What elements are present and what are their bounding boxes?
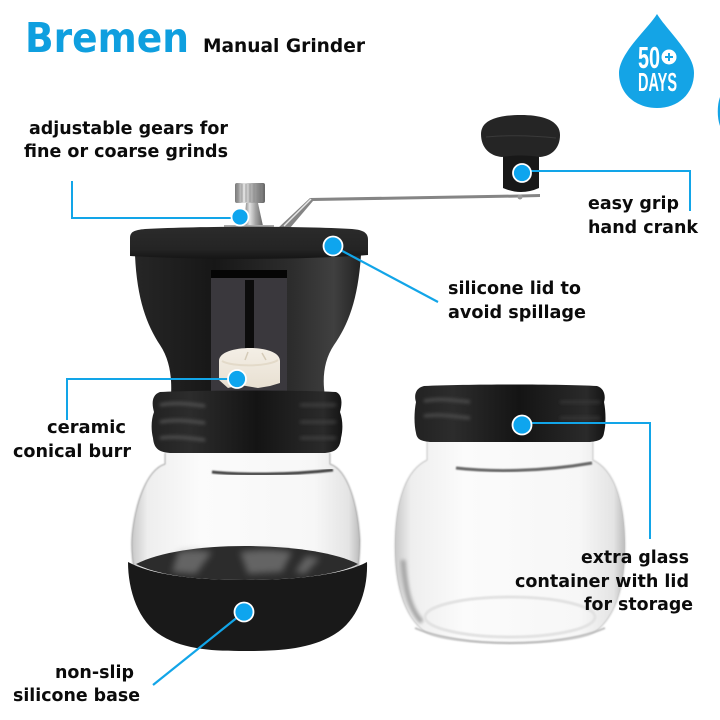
dark interior of base seen through glass	[136, 546, 358, 580]
callout: extra glass container: extra glass	[581, 547, 689, 568]
callout: non-slip silicone base	[13, 602, 254, 706]
callout: easy grip hand crank: hand crank	[588, 217, 699, 238]
callout: silicone lid: silicone lid to	[448, 278, 581, 299]
grinder crank handle	[278, 115, 560, 228]
callout: easy grip hand crank	[513, 164, 699, 238]
icon: 50+ days water drop: DAYS	[638, 67, 677, 97]
callout: non-slip silicone base: non-slip	[55, 662, 134, 683]
icon: 50+ days water drop	[619, 14, 694, 108]
callout: extra glass container	[512, 416, 693, 615]
callout: ceramic conical burr: conical burr	[13, 441, 131, 462]
icon: 50+ days water drop: 50	[638, 40, 660, 75]
spare glass jar	[395, 442, 625, 643]
spare jar lid	[414, 384, 606, 442]
callout: adjustable gears	[24, 118, 248, 226]
callout: extra glass container: container with lid	[515, 571, 689, 592]
window showing burr	[211, 270, 287, 396]
callout: silicone lid: avoid spillage	[448, 302, 586, 323]
grinder glass jar	[132, 453, 360, 580]
callout: easy grip hand crank: easy grip	[588, 193, 679, 214]
callout: non-slip silicone base: silicone base	[13, 685, 140, 706]
grinder silicone base	[128, 562, 367, 651]
title	[25, 14, 366, 62]
callout: extra glass container: for storage	[584, 594, 693, 615]
callout: ceramic conical burr: ceramic	[47, 417, 126, 438]
callout: ceramic conical burr	[13, 370, 246, 462]
decorative sliver of blue at right edge	[718, 97, 720, 126]
grinder adjustment knob	[224, 183, 274, 228]
grinder lid	[130, 227, 368, 259]
grinder threaded ring	[152, 390, 342, 453]
callout: silicone lid	[324, 236, 586, 323]
grinder body: hopper	[135, 255, 361, 396]
title: Manual Grinder	[203, 35, 366, 57]
callout: adjustable gears: fine or coarse grinds	[24, 141, 228, 162]
title: Bremen	[25, 14, 189, 62]
callout: adjustable gears: adjustable gears for	[29, 118, 228, 139]
